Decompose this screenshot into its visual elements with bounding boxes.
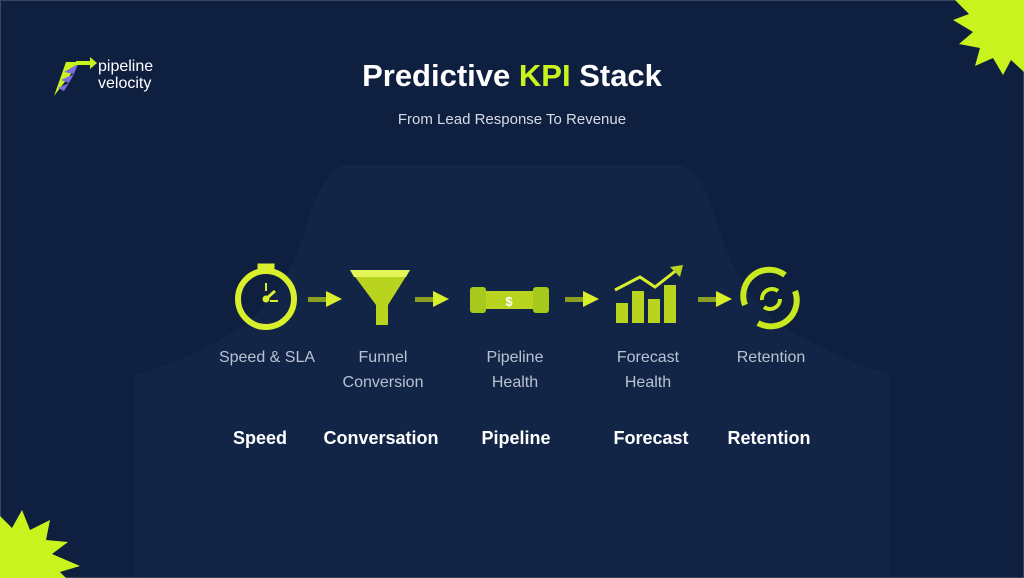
text: Forecast [617,349,679,366]
icon: stopwatch [238,264,294,327]
text: Pipeline [487,349,543,366]
arrow 2 [415,291,449,307]
logo: velocity [98,75,151,92]
text: Retention [737,349,805,366]
labels: Speed & SLA [219,349,315,366]
icon: retention cycle [743,270,797,326]
icon: pipeline money: $ [505,294,513,309]
text: Conversion [343,374,423,391]
subtitle: From Lead Response To Revenue [398,111,626,128]
bottom labels: Speed [233,428,287,448]
text: Pipeline [481,428,551,448]
logo [54,57,153,96]
icon: pipeline money [470,287,549,313]
title: Predictive KPI Stack [362,58,662,93]
text: Retention [728,428,810,448]
corner blob bottom-left [0,510,80,578]
text: Conversation [323,428,439,448]
logo: pipeline [98,58,153,75]
icon: bar chart [615,265,683,323]
text: Forecast [613,428,689,448]
arrow 1 [308,291,342,307]
text: Health [625,374,671,391]
corner blob top-right [953,0,1024,75]
icon row [235,264,800,330]
arrow 3 [565,291,599,307]
text: Funnel [359,349,407,366]
icon: funnel [350,270,410,325]
text: Health [492,374,538,391]
arrow 4 [698,291,732,307]
